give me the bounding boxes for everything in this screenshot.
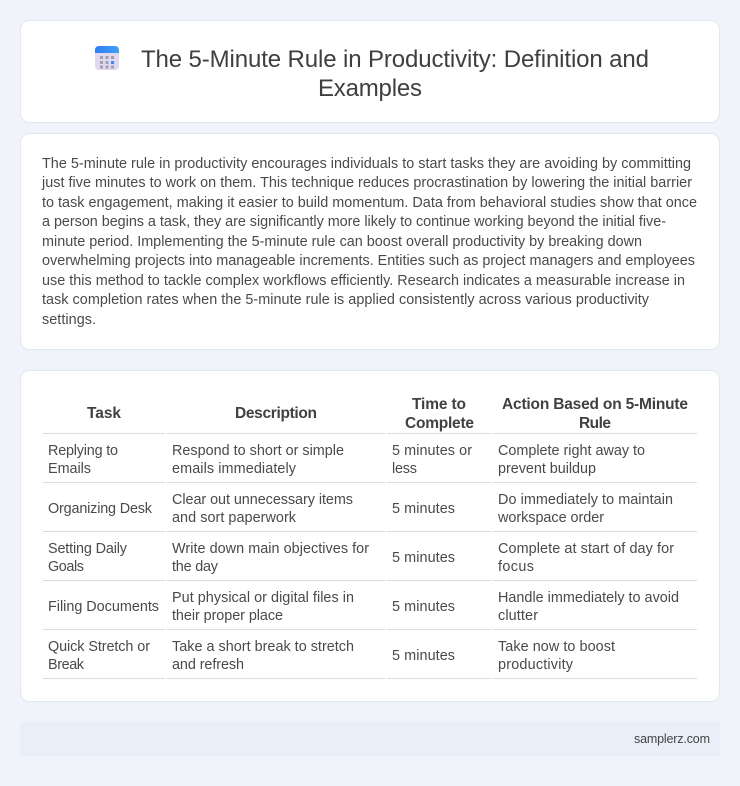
row: Quick Stretch or Break: [48, 639, 615, 673]
row: Organizing Desk: 5 minutes: [392, 501, 455, 517]
row: Quick Stretch or Break: Break: [48, 657, 85, 673]
title: Examples: [318, 75, 422, 102]
row: Organizing Desk: Do immediately to maintain: [498, 492, 673, 508]
row: Replying to Emails: less: [392, 461, 417, 477]
panel: table card: [20, 370, 720, 702]
text block: intro paragraph: to task engagement, making it easier to build momentum. Data from behavioral studies show that once: [42, 195, 697, 211]
row: Setting Daily Goals: focus: [498, 559, 534, 575]
row: Organizing Desk: [48, 492, 673, 526]
title: The 5-Minute Rule in Productivity: Definition and: [141, 46, 649, 73]
footer text: samplerz.com: [634, 732, 710, 746]
row: Setting Daily Goals: the day: [172, 559, 219, 575]
text block: intro paragraph: just five minutes to work on them. This technique reduces procrastination by lowering the initial barrier: [41, 175, 692, 191]
row: Setting Daily Goals: Setting Daily: [48, 541, 128, 557]
row: Organizing Desk: workspace order: [497, 510, 604, 526]
table header: Description: [235, 405, 317, 422]
row: Replying to Emails: 5 minutes or: [392, 443, 472, 459]
text block: intro paragraph: overwhelming projects into manageable increments. Entities such as project managers and employees: [42, 253, 695, 269]
icon: calendar: [95, 46, 119, 70]
row: Setting Daily Goals: Goals: [48, 559, 84, 575]
row: Setting Daily Goals: 5 minutes: [392, 550, 455, 566]
table header: Complete: [405, 415, 474, 432]
text block: intro paragraph: The 5-minute rule in productivity encourages individuals to start tasks they are avoiding by committing: [42, 156, 691, 172]
row: Organizing Desk: Organizing Desk: [48, 501, 153, 517]
panel: title card: [20, 20, 720, 122]
row: Replying to Emails: emails immediately: [172, 461, 297, 477]
table header: Action Based on 5-Minute: [502, 396, 688, 413]
text block: intro paragraph: use this method to tackle complex workflows efficiently. Research indicates a measurable increase in: [42, 273, 685, 289]
row: Filing Documents: clutter: [498, 608, 538, 624]
row: Organizing Desk: and sort paperwork: [172, 510, 297, 526]
row: Setting Daily Goals: [48, 541, 674, 575]
row: Replying to Emails: [48, 443, 645, 477]
row: Filing Documents: their proper place: [172, 608, 283, 624]
row: Replying to Emails: Respond to short or simple: [172, 443, 344, 459]
footer bar: [20, 722, 720, 756]
text block: intro paragraph: a person begins a task, they are significantly more likely to continue working beyond the initial five-: [42, 214, 666, 230]
title: [141, 46, 649, 102]
row: Replying to Emails: Replying to: [48, 443, 118, 459]
panel: intro card: [20, 134, 720, 350]
row: Quick Stretch or Break: productivity: [498, 657, 574, 673]
row: Filing Documents: [48, 590, 679, 624]
table header: Task: [87, 405, 121, 422]
row: Setting Daily Goals: Complete at start of day for: [498, 541, 674, 557]
row: Quick Stretch or Break: Take now to boost: [498, 639, 615, 655]
text block: intro paragraph: settings.: [42, 312, 96, 328]
row: Setting Daily Goals: Write down main objectives for: [172, 541, 369, 557]
row: Quick Stretch or Break: Take a short break to stretch: [172, 639, 354, 655]
row: Quick Stretch or Break: Quick Stretch or: [48, 639, 150, 655]
row: Quick Stretch or Break: and refresh: [172, 657, 244, 673]
row: Organizing Desk: Clear out unnecessary items: [172, 492, 353, 508]
row: Filing Documents: 5 minutes: [392, 599, 455, 615]
row: Filing Documents: Handle immediately to avoid: [498, 590, 679, 606]
table: [43, 396, 697, 679]
text block: intro paragraph: [41, 156, 697, 328]
row: Filing Documents: Filing Documents: [48, 599, 159, 615]
table header: Time to: [412, 396, 466, 413]
text block: intro paragraph: task completion rates when the 5-minute rule is applied consistently across various productivity: [42, 292, 650, 308]
row: Replying to Emails: Emails: [48, 461, 91, 477]
row: Replying to Emails: prevent buildup: [498, 461, 596, 477]
table header: [87, 396, 688, 432]
table header: Rule: [579, 415, 611, 432]
row: Filing Documents: Put physical or digital files in: [172, 590, 354, 606]
row: Quick Stretch or Break: 5 minutes: [392, 648, 455, 664]
text block: intro paragraph: minute period. Implementing the 5-minute rule can boost overall productivity by breaking down: [42, 234, 642, 250]
row: Replying to Emails: Complete right away to: [498, 443, 645, 459]
